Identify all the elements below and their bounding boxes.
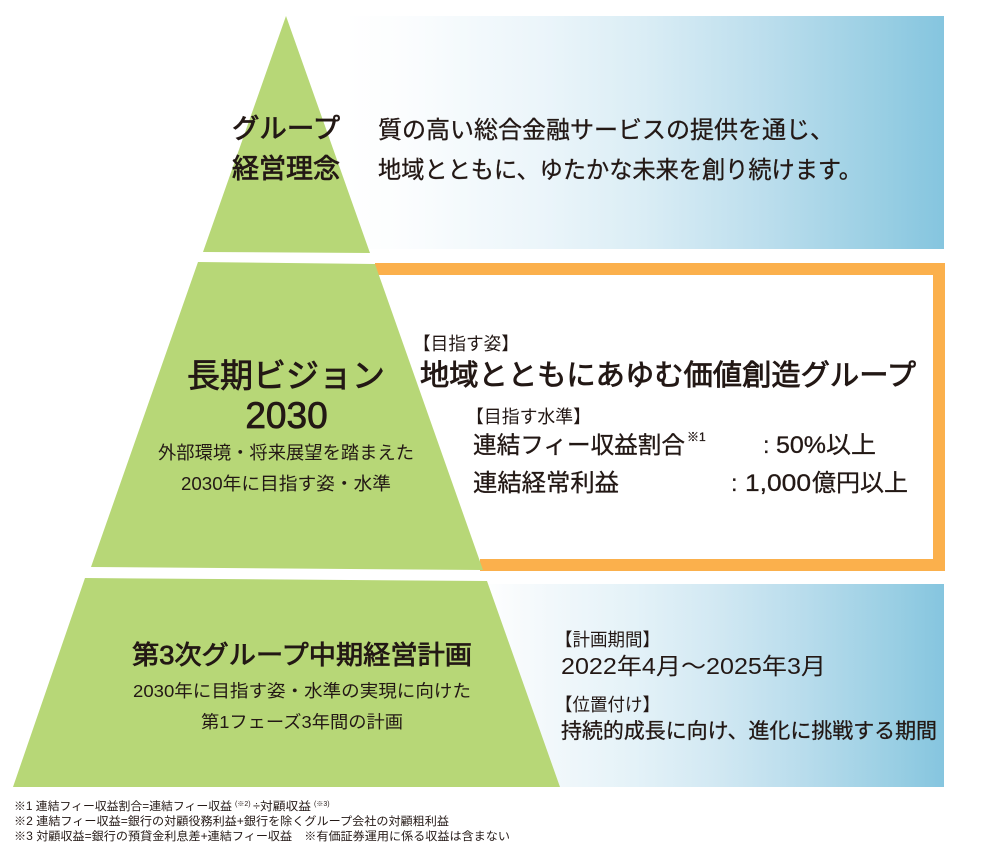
text: plan positioning: 持続的成長に向け、進化に挑戦する期間	[561, 720, 937, 743]
text: vision targets: 【目指す水準】	[466, 407, 591, 427]
text: vision aim	[413, 334, 916, 392]
heading: group philosophy	[232, 114, 340, 184]
text: vision targets: 連結フィー収益割合	[473, 432, 685, 458]
footnotes: ※2 連結フィー収益=銀行の対顧役務利益+銀行を除くグループ会社の対顧粗利益	[14, 814, 450, 828]
text: plan description: 第1フェーズ3年間の計画	[201, 712, 403, 732]
heading: group philosophy: 経営理念	[232, 154, 340, 184]
text: vision aim: 地域とともにあゆむ価値創造グループ	[420, 359, 916, 392]
text: vision targets: 連結経常利益	[473, 470, 619, 497]
text: vision description: 外部環境・将来展望を踏まえた	[158, 443, 414, 463]
text: plan period	[555, 630, 826, 679]
text: vision targets: :	[731, 470, 738, 496]
panel: vision orange frame	[375, 263, 945, 571]
text: plan period: 2022年4月～2025年3月	[561, 653, 826, 679]
text: vision targets: 億円以上	[812, 470, 908, 497]
text: vision targets	[466, 407, 908, 497]
text: philosophy statement: 質の高い総合金融サービスの提供を通じ、	[378, 117, 834, 144]
pyramid tier: bottom	[13, 578, 560, 787]
pyramid tier: middle	[91, 262, 483, 570]
panel: medium-term plan background	[480, 584, 944, 787]
footnotes: (※3)	[314, 800, 330, 808]
text: philosophy statement: 地域とともに、ゆたかな未来を創り続けます。	[378, 157, 862, 184]
heading: long-term vision 2030: 長期ビジョン	[187, 357, 385, 394]
text: vision aim: 【目指す姿】	[413, 334, 519, 354]
heading: long-term vision 2030: 2030	[245, 395, 328, 436]
text: plan description	[133, 681, 471, 732]
text: vision description: 2030年に目指す姿・水準	[181, 474, 391, 494]
text: vision description	[158, 443, 414, 494]
text: vision targets: :	[763, 432, 770, 458]
heading: long-term vision 2030	[187, 357, 385, 436]
text: philosophy statement	[378, 117, 862, 184]
footnotes: ※1 連結フィー収益割合=連結フィー収益	[14, 799, 233, 813]
text: plan period: 【計画期間】	[555, 630, 660, 650]
pyramid tier: top	[203, 16, 370, 253]
heading: group philosophy: グループ	[232, 114, 340, 144]
text: vision targets: 1,000	[745, 470, 811, 497]
footnotes: ÷対顧収益	[253, 799, 312, 813]
text: plan positioning: 【位置付け】	[555, 695, 660, 715]
text: plan description: 2030年に目指す姿・水準の実現に向けた	[133, 681, 471, 701]
footnotes	[14, 799, 510, 843]
footnotes: (※2)	[235, 800, 251, 808]
heading: medium-term plan: 第3次グループ中期経営計画	[132, 640, 472, 670]
text: plan positioning	[555, 695, 937, 743]
panel: philosophy background	[345, 16, 944, 249]
text: vision targets: 50%以上	[776, 432, 876, 459]
text: vision targets: ※1	[687, 430, 706, 444]
footnotes: ※3 対顧収益=銀行の預貸金利息差+連結フィー収益 ※有価証券運用に係る収益は含まない	[14, 829, 510, 843]
